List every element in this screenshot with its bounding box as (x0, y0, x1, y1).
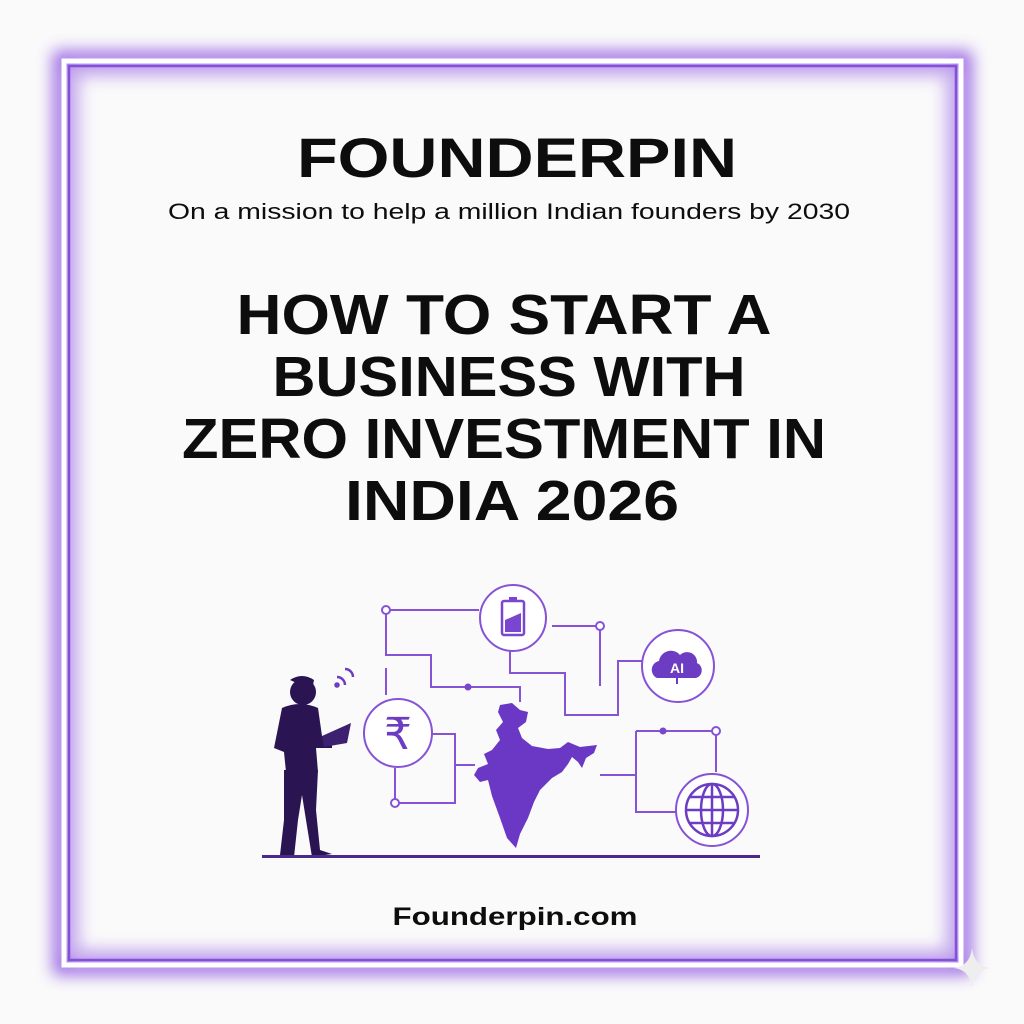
icon: AI cloud (642, 630, 714, 702)
illustration (262, 585, 760, 858)
icon: rupee (364, 699, 432, 767)
brand name: FOUNDERPIN (297, 126, 737, 189)
main title: ZERO INVESTMENT IN (182, 407, 826, 471)
main title (182, 283, 826, 533)
main title: BUSINESS WITH (272, 345, 746, 409)
India map (474, 703, 597, 848)
icon: battery (480, 585, 546, 651)
tagline: On a mission to help a million Indian founders by 2030 (168, 199, 850, 224)
ground line (262, 855, 760, 858)
main title: HOW TO START A (236, 283, 772, 347)
main title: INDIA 2026 (345, 469, 679, 533)
sparkle icon (954, 948, 990, 988)
website url: Founderpin.com (392, 903, 638, 931)
connector lines (386, 610, 716, 812)
frame: glowing purple border (60, 58, 965, 968)
person with laptop (274, 676, 351, 857)
icon: rupee: ₹ (384, 710, 412, 759)
icon: globe (676, 774, 748, 846)
icon: AI cloud: AI (670, 660, 684, 676)
icon: wifi signal (336, 669, 353, 686)
